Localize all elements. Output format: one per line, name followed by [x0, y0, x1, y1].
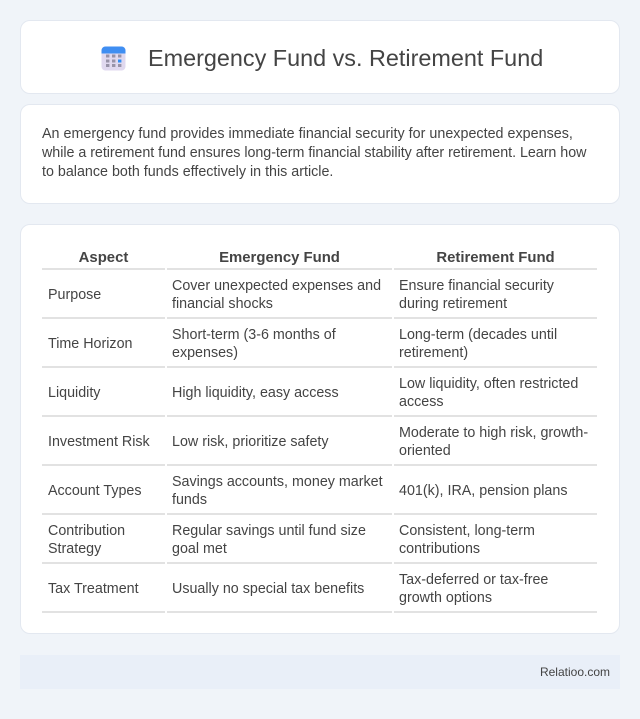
- footer: [20, 655, 620, 689]
- row: Account Types: Account Types: [48, 483, 142, 499]
- row: Investment Risk: Moderate to high risk, growth-: [399, 425, 588, 441]
- row: Time Horizon: Long-term (decades until: [399, 327, 557, 343]
- row: Account Types: [48, 474, 567, 508]
- row: Liquidity: Liquidity: [48, 385, 100, 401]
- row: Purpose: Ensure financial security: [399, 278, 554, 294]
- text block: introduction: to balance both funds effectively in this article.: [42, 164, 333, 180]
- row: Account Types: funds: [172, 492, 207, 508]
- row: Purpose: financial shocks: [172, 296, 273, 312]
- row: Purpose: Purpose: [48, 287, 101, 303]
- row: Purpose: during retirement: [399, 296, 507, 312]
- row: Purpose: [48, 278, 554, 312]
- row: Contribution Strategy: contributions: [399, 541, 480, 557]
- row: Contribution Strategy: Regular savings until fund size: [172, 523, 366, 539]
- panel: title header: [20, 20, 620, 94]
- row: Account Types: 401(k), IRA, pension plans: [399, 483, 567, 499]
- row: Tax Treatment: Tax-deferred or tax-free: [399, 572, 548, 588]
- row: Time Horizon: Short-term (3-6 months of: [172, 327, 336, 343]
- text block: introduction: An emergency fund provides immediate financial security for unexpected expenses,: [42, 126, 573, 142]
- table header: Emergency Fund: [219, 250, 340, 266]
- row: Contribution Strategy: Contribution: [48, 523, 125, 539]
- row: Liquidity: access: [399, 394, 444, 410]
- row: Tax Treatment: Usually no special tax benefits: [172, 581, 364, 597]
- row: Tax Treatment: Tax Treatment: [48, 581, 139, 597]
- text block: introduction: while a retirement fund ensures long-term financial stability after retirement. Learn how: [42, 145, 586, 161]
- row: Contribution Strategy: [48, 523, 535, 557]
- table header: Aspect: [79, 250, 128, 266]
- table header: Retirement Fund: [436, 250, 555, 266]
- row: Time Horizon: [48, 327, 557, 361]
- row: Contribution Strategy: Strategy: [48, 541, 101, 557]
- table header: [79, 250, 555, 266]
- row: Time Horizon: retirement): [399, 345, 468, 361]
- row: Purpose: Cover unexpected expenses and: [172, 278, 381, 294]
- row: Contribution Strategy: Consistent, long-term: [399, 523, 535, 539]
- row: Time Horizon: expenses): [172, 345, 238, 361]
- icon: calendar: [102, 46, 126, 70]
- row: Investment Risk: Investment Risk: [48, 434, 150, 450]
- title: Emergency Fund vs. Retirement Fund: [148, 45, 543, 71]
- row: Contribution Strategy: goal met: [172, 541, 227, 557]
- footer credit: Relatioo.com: [540, 665, 610, 679]
- row: Investment Risk: [48, 425, 588, 459]
- row: Tax Treatment: growth options: [399, 590, 492, 606]
- row: Investment Risk: oriented: [399, 443, 451, 459]
- row: Liquidity: Low liquidity, often restricted: [399, 376, 578, 392]
- row: Liquidity: High liquidity, easy access: [172, 385, 339, 401]
- row: Liquidity: [48, 376, 578, 410]
- row: Account Types: Savings accounts, money market: [172, 474, 383, 490]
- panel: introduction: [20, 104, 620, 204]
- row: Tax Treatment: [48, 572, 548, 606]
- text block: introduction: [42, 126, 586, 180]
- row: Time Horizon: Time Horizon: [48, 336, 132, 352]
- row: Investment Risk: Low risk, prioritize safety: [172, 434, 329, 450]
- panel: comparison table: [20, 224, 620, 634]
